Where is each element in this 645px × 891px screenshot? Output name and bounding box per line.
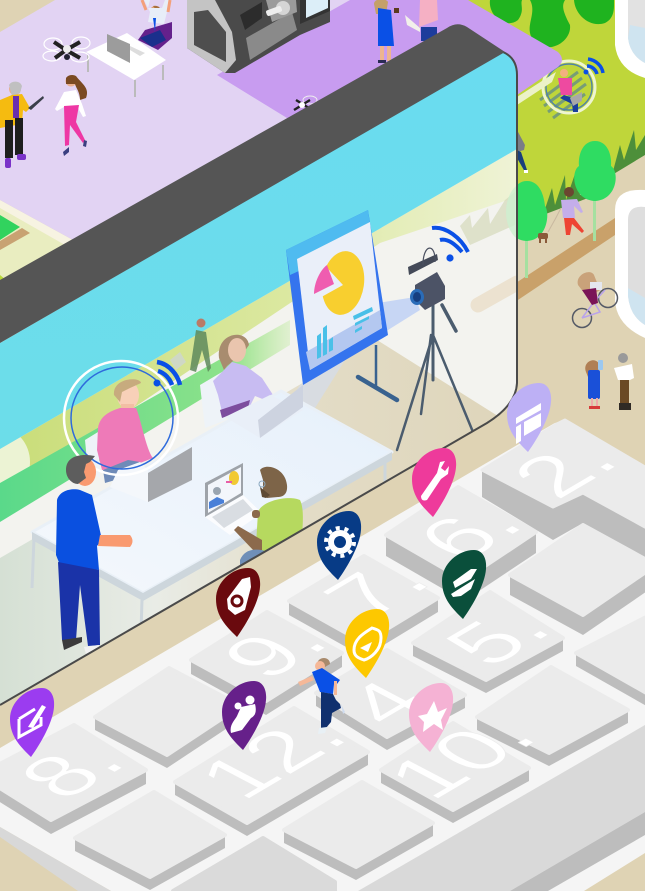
key: blank lower middle	[284, 782, 433, 880]
man with tablet	[0, 82, 44, 168]
grass tufts	[543, 130, 645, 215]
ghost path	[478, 283, 517, 305]
gardener ghost	[170, 318, 211, 372]
presentation board	[286, 210, 388, 385]
key: 5: 5.	[424, 596, 571, 677]
man with laptop	[405, 0, 438, 41]
lawn top right	[440, 0, 645, 231]
chair pink person	[85, 432, 100, 478]
pale lawn edge under purple	[517, 72, 556, 105]
key: 7	[289, 548, 450, 657]
lawn corner left	[0, 200, 80, 292]
key: 12: 12.	[177, 703, 368, 810]
pin: layers	[442, 550, 486, 619]
key: blank lower right	[477, 667, 628, 766]
ghost grass	[460, 198, 509, 245]
small drone	[294, 96, 318, 114]
space bar	[358, 725, 645, 891]
ghost blob	[0, 437, 30, 483]
table beam	[297, 360, 344, 408]
pin: wrench	[412, 448, 456, 517]
key: 6: 6.	[396, 491, 543, 572]
building right	[615, 190, 645, 338]
standing man in blue	[56, 455, 132, 654]
drone	[43, 37, 90, 62]
cyclist	[572, 272, 618, 328]
seated person at desk top	[138, 0, 172, 50]
pin: edit	[10, 688, 54, 757]
pink shirt person	[97, 379, 153, 483]
brown path	[470, 218, 615, 332]
light trees	[506, 141, 616, 278]
pin: gear	[317, 511, 361, 580]
pink person laptop	[110, 447, 192, 502]
window base	[0, 55, 516, 558]
key: 4: 4.	[323, 656, 470, 737]
key: 7: 7.	[303, 548, 450, 629]
woman with coffee	[374, 0, 399, 63]
green band	[0, 320, 290, 522]
key: 2: 2.	[491, 428, 638, 509]
key: blank bottom	[173, 838, 335, 891]
woman laptop	[225, 385, 303, 438]
pale lawn band	[20, 150, 516, 466]
pin: star	[409, 683, 453, 752]
road through glass	[0, 340, 517, 720]
key: 9: 9.	[201, 609, 348, 690]
key: 2	[482, 420, 645, 560]
camera wifi signal	[432, 228, 468, 262]
running man	[298, 658, 345, 734]
ghost tree	[506, 186, 516, 238]
purple floor	[217, 0, 562, 140]
woman in pink trousers	[55, 75, 87, 156]
key: blank lower left	[75, 792, 225, 890]
white desk with monitor	[86, 33, 166, 97]
person walking behind window edge	[517, 130, 528, 173]
window panel	[0, 53, 516, 704]
key: 10: 10.	[366, 703, 557, 810]
couple talking	[585, 353, 634, 410]
selection rings and wifi	[64, 361, 180, 475]
dark roof band	[0, 24, 505, 343]
video camera	[408, 248, 445, 310]
pin: people	[222, 681, 266, 750]
board stand	[358, 345, 397, 400]
green shirt man	[234, 466, 303, 565]
keyboard edge	[0, 827, 111, 891]
walking woman with dog	[538, 187, 584, 243]
pin: rocket gear	[216, 568, 260, 637]
green shirt man laptop	[205, 463, 262, 535]
tripod	[397, 300, 473, 450]
bench person with wifi	[540, 59, 603, 118]
keyboard base	[0, 422, 645, 891]
table	[32, 391, 392, 632]
pin: layout	[507, 383, 551, 452]
window outline	[0, 52, 517, 705]
key: 6	[386, 487, 543, 601]
chair behind woman	[200, 372, 226, 428]
key: blank	[95, 668, 241, 768]
machine	[187, 0, 330, 73]
key: blank far right	[576, 610, 645, 708]
lilac woman	[213, 335, 275, 418]
building top right	[615, 0, 645, 78]
camera beam	[382, 298, 420, 330]
dark trees top	[490, 0, 614, 47]
key: 8: 8.	[0, 729, 145, 810]
pin: shield	[345, 609, 389, 678]
lilac floor	[0, 0, 400, 240]
cyan glass band	[0, 52, 517, 449]
key: blank right	[510, 525, 645, 635]
